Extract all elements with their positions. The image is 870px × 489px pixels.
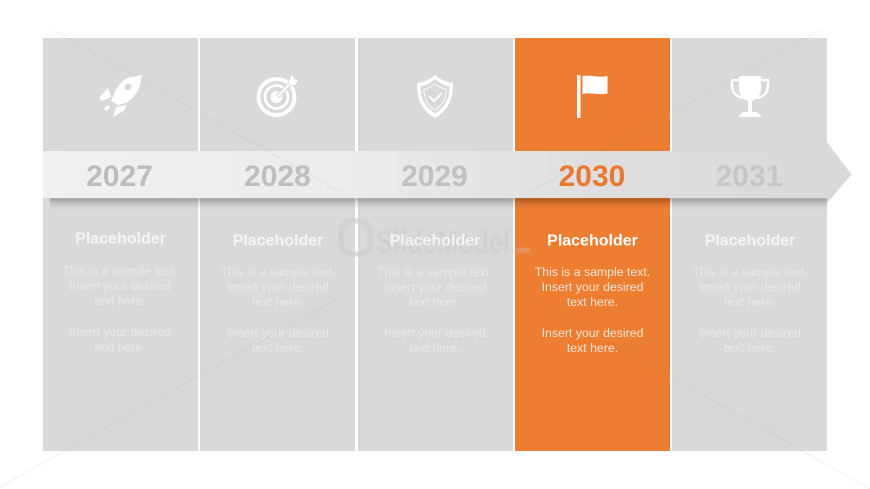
column text: 2028: text here. bbox=[252, 295, 304, 309]
column text: 2031: text here. bbox=[724, 295, 776, 309]
column text: 2031: Placeholder bbox=[705, 232, 795, 250]
column text: 2031: Insert your desired bbox=[699, 326, 801, 340]
watermark: .com bbox=[511, 245, 531, 255]
column panel: 2029 bbox=[358, 38, 513, 451]
year 2031: 2031 bbox=[716, 160, 782, 193]
column text: 2029: Placeholder bbox=[390, 232, 480, 250]
column text: 2031: text here. bbox=[724, 341, 776, 355]
column text: 2028: Placeholder bbox=[233, 232, 323, 250]
column panel: 2031 bbox=[672, 38, 827, 451]
column text: 2030: text here. bbox=[567, 295, 618, 309]
column text: 2027: This is a sample text. bbox=[62, 264, 178, 278]
column panel: 2027 bbox=[43, 38, 198, 451]
column text: 2027 bbox=[62, 230, 178, 354]
icon: target bbox=[258, 75, 298, 115]
column text: 2028 bbox=[220, 232, 336, 355]
column text: 2027: text here. bbox=[94, 340, 146, 354]
column text: 2031 bbox=[692, 232, 808, 355]
column text: 2030 bbox=[535, 232, 650, 355]
column text: 2028: Insert your desired bbox=[227, 280, 329, 294]
column text: 2031: Insert your desired bbox=[699, 280, 801, 294]
column text: 2029: Insert your desired bbox=[384, 326, 486, 340]
column text: 2029: Insert your desired bbox=[384, 280, 486, 294]
column text: 2030: text here. bbox=[567, 341, 618, 355]
band shadow bbox=[50, 198, 827, 209]
column text: 2028: This is a sample text. bbox=[220, 265, 336, 279]
year 2030: 2030 bbox=[559, 160, 625, 193]
icon: rocket bbox=[99, 75, 142, 117]
column text: 2029: This is a sample text. bbox=[377, 265, 493, 279]
icon: shield with check bbox=[417, 75, 453, 118]
column text: 2030: Insert your desired bbox=[542, 326, 644, 340]
column text: 2027: text here. bbox=[94, 294, 146, 308]
column text: 2027: Insert your desired bbox=[69, 279, 171, 293]
column panel: 2030 highlighted bbox=[515, 38, 670, 451]
column text: 2030: This is a sample text. bbox=[535, 265, 650, 279]
year 2029: 2029 bbox=[401, 160, 468, 193]
year 2027: 2027 bbox=[86, 160, 153, 193]
column text: 2029 bbox=[377, 232, 493, 355]
timeline arrow band bbox=[43, 142, 852, 203]
column panel: 2028 bbox=[200, 38, 355, 451]
column text: 2028: text here. bbox=[252, 341, 304, 355]
column text: 2028: Insert your desired bbox=[227, 326, 329, 340]
year labels bbox=[86, 160, 782, 193]
column text: 2031: This is a sample text. bbox=[692, 265, 808, 279]
column text: 2029: text here. bbox=[409, 341, 461, 355]
column text: 2030: Insert your desired bbox=[542, 280, 644, 294]
column text: 2027: Placeholder bbox=[75, 230, 166, 248]
column text: 2027: Insert your desired bbox=[69, 325, 171, 339]
watermark: SlideModel bbox=[376, 224, 510, 260]
column text: 2029: text here. bbox=[409, 295, 461, 309]
icon: trophy bbox=[732, 76, 768, 117]
column text: 2030: Placeholder bbox=[547, 232, 638, 250]
icon: flag bbox=[577, 75, 608, 118]
year 2028: 2028 bbox=[244, 160, 311, 193]
